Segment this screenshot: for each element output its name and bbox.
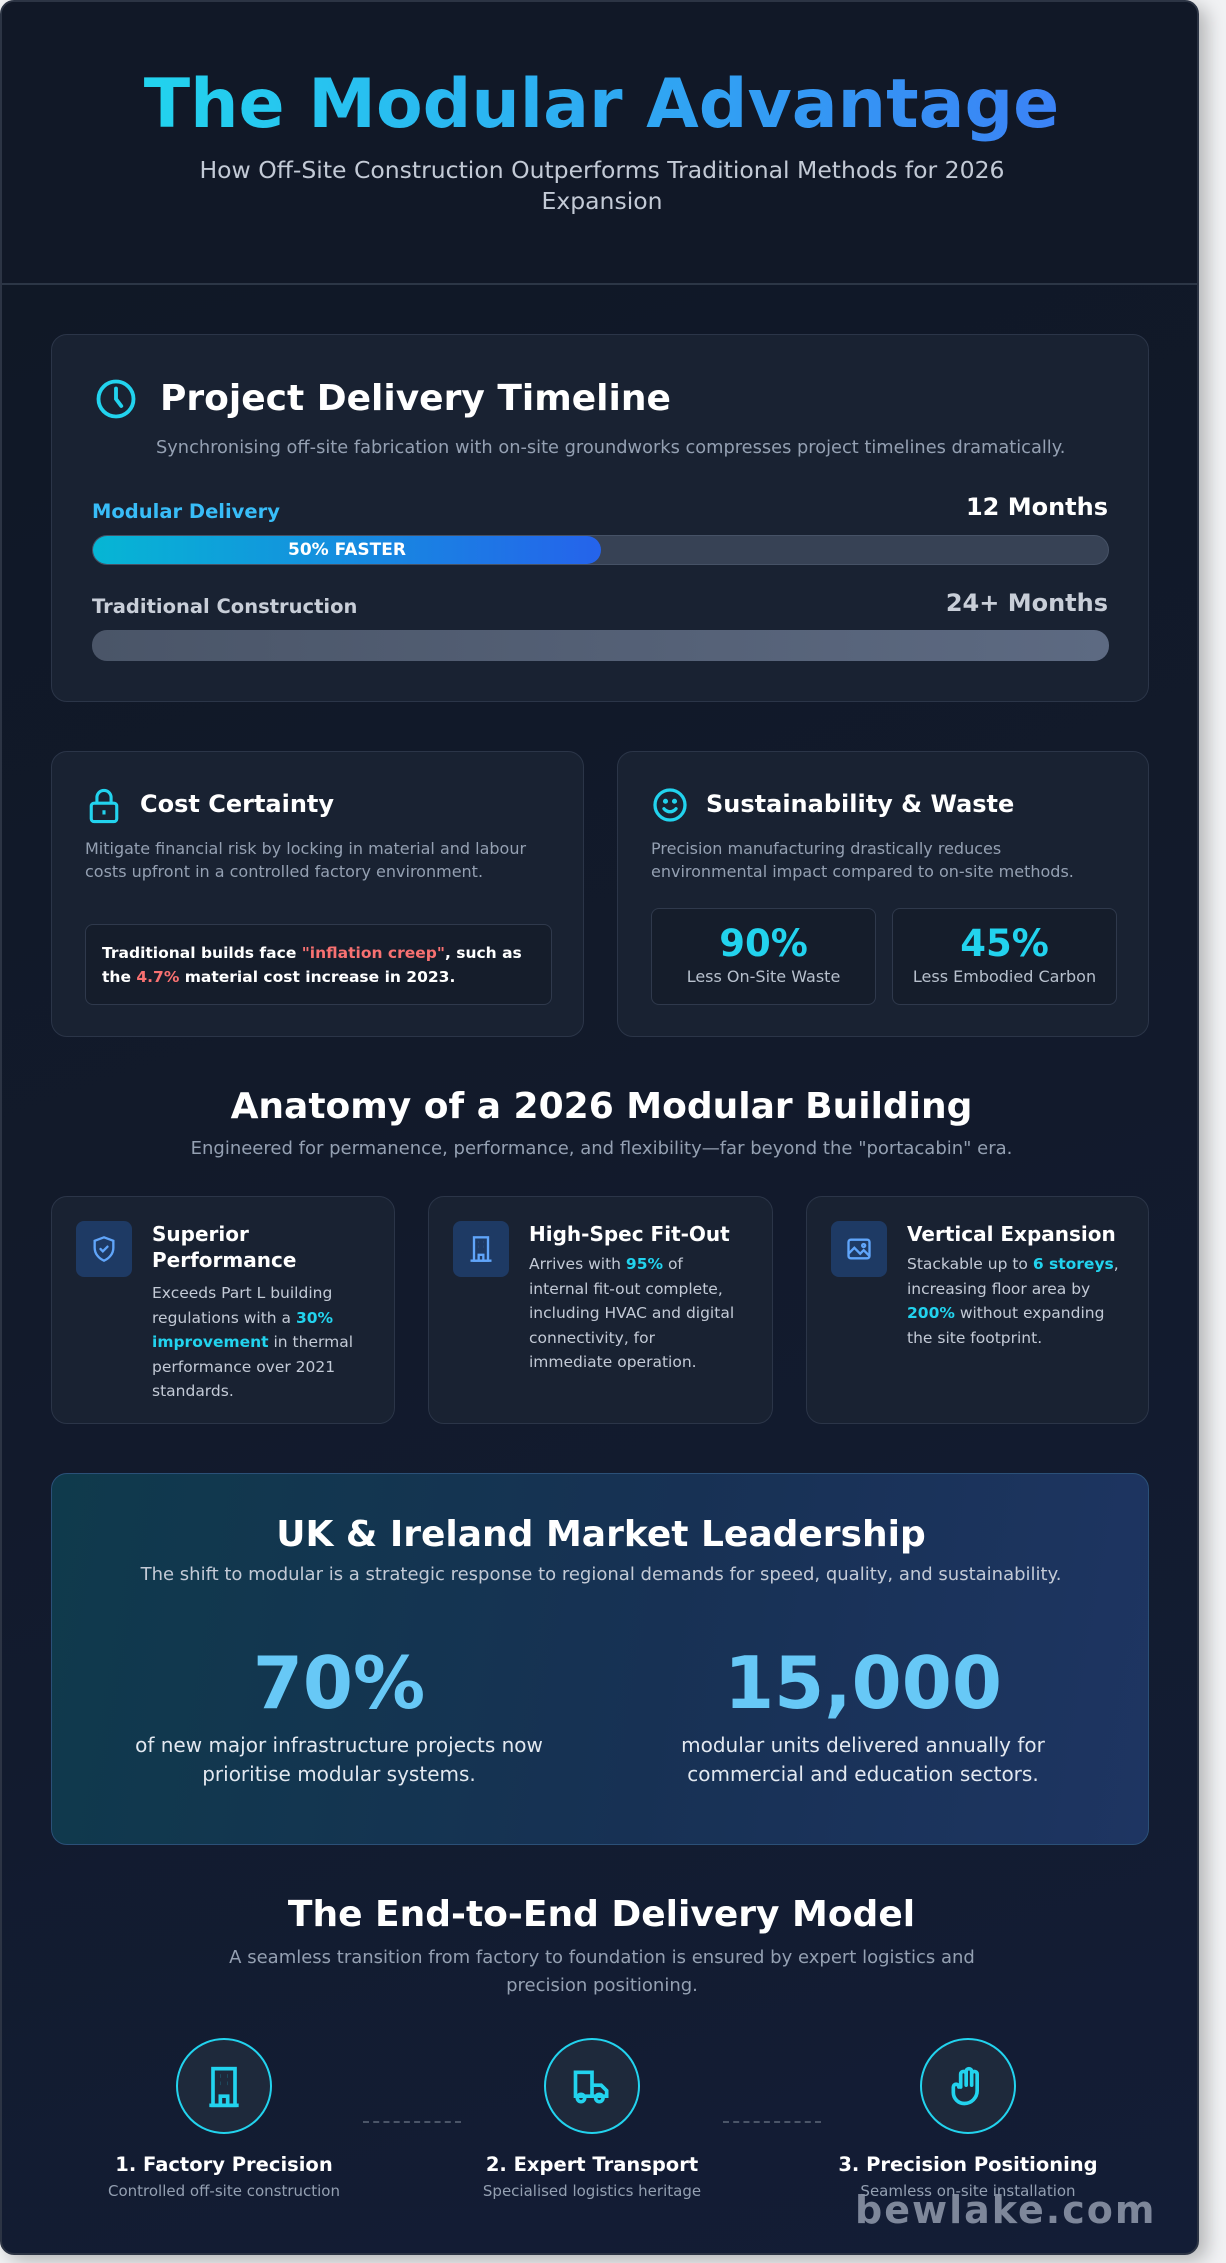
heading: Project Delivery Timeline: [160, 378, 671, 419]
stat: 70%: 70%: [253, 1641, 425, 1725]
description: Mitigate financial risk by locking in material and labour costs upfront in a controlled factory environment.: [85, 839, 526, 881]
panel: sustainability: [617, 751, 1149, 1037]
step 3: [838, 2038, 1098, 2200]
title: Superior: [152, 1222, 249, 1246]
panel: market leadership: [51, 1473, 1149, 1845]
arrow: connector 2: [723, 2121, 821, 2123]
step 2: Specialised logistics heritage: [483, 2182, 701, 2200]
step 1: [108, 2038, 340, 2200]
subheading: anatomy: Engineered for permanence, performance, and flexibility—far beyond the "portacabin" era.: [191, 1138, 1012, 1159]
heading: delivery model: The End-to-End Delivery Model: [288, 1894, 915, 1935]
step 2: [483, 2038, 701, 2200]
icon: image: [831, 1221, 887, 1277]
title: [152, 1222, 296, 1272]
stat: 70%: prioritise modular systems.: [202, 1762, 476, 1786]
stat: 90%: [651, 908, 876, 1005]
stat: 45%: 45%: [960, 922, 1049, 965]
watermark: bewlake.com: [855, 2188, 1156, 2232]
card: superior performance: [51, 1196, 395, 1424]
icon: smiley: [653, 788, 687, 822]
stat: 90%: Less On-Site Waste: [687, 967, 840, 986]
title: High-Spec Fit-Out: [529, 1222, 730, 1246]
description: Precision manufacturing drastically reduces environmental impact compared to on-site methods.: [651, 839, 1074, 881]
step 1: 1. Factory Precision: [115, 2153, 333, 2176]
panel: timeline: [51, 334, 1149, 702]
subheading: delivery model: A seamless transition from factory to foundation is ensured by expert logistics and precision positioning.: [229, 1947, 975, 1996]
title: Vertical Expansion: [907, 1222, 1116, 1246]
callout: [85, 924, 552, 1005]
icon: shield: [76, 1221, 132, 1277]
icon: lock: [90, 788, 118, 824]
stat: 70%: [135, 1641, 543, 1786]
body: Arrives with 95% of internal fit-out complete, including HVAC and digital connectivity, for immediate operation.: [529, 1255, 734, 1371]
label: modular: Modular Delivery: [92, 500, 280, 523]
icon: building: [453, 1221, 509, 1277]
value: 24 months: 24+ Months: [946, 589, 1108, 617]
bar: traditional: [92, 630, 1109, 661]
callout: Traditional builds face "inflation creep", such as the 4.7% material cost increase in 2023.: [102, 944, 522, 986]
step 2: 2. Expert Transport: [486, 2153, 698, 2176]
value: 12 months: 12 Months: [966, 493, 1108, 521]
stat: 15,000: commercial and education sectors.: [687, 1762, 1039, 1786]
stat: 15,000: [681, 1641, 1045, 1786]
icon: factory: [176, 2038, 272, 2134]
title: Performance: [152, 1248, 296, 1272]
stat: 45%: [892, 908, 1117, 1005]
label: traditional: Traditional Construction: [92, 595, 357, 618]
heading: UK & Ireland Market Leadership: [276, 1514, 926, 1555]
heading: Cost Certainty: [140, 790, 334, 818]
icon: truck: [544, 2038, 640, 2134]
heading: anatomy: Anatomy of a 2026 Modular Building: [231, 1086, 972, 1127]
stat: 15,000: modular units delivered annually for: [681, 1733, 1045, 1757]
stat: 45%: Less Embodied Carbon: [913, 967, 1096, 986]
description: Synchronising off-site fabrication with on-site groundworks compresses project timelines dramatically.: [156, 437, 1065, 458]
arrow: connector 1: [363, 2121, 461, 2123]
card: vertical expansion: [806, 1196, 1149, 1424]
title: The Modular Advantage: [144, 65, 1059, 144]
icon: hand: [920, 2038, 1016, 2134]
step 1: Controlled off-site construction: [108, 2182, 340, 2200]
icon: clock: [96, 380, 136, 418]
bar: modular: 50% FASTER: [288, 540, 406, 560]
stat: 15,000: 15,000: [724, 1641, 1002, 1725]
body: Exceeds Part L building regulations with a 30% improvement in thermal performance over 2021 standards.: [152, 1284, 353, 1400]
stat: 90%: 90%: [719, 922, 808, 965]
heading: Sustainability & Waste: [706, 790, 1014, 818]
stat: 70%: of new major infrastructure projects now: [135, 1733, 543, 1757]
bar: modular: [92, 535, 1109, 565]
card: high-spec fit-out: [428, 1196, 773, 1424]
step 3: 3. Precision Positioning: [838, 2153, 1098, 2176]
body: Stackable up to 6 storeys, increasing floor area by 200% without expanding the site footprint.: [907, 1255, 1119, 1346]
subheading: The shift to modular is a strategic response to regional demands for speed, quality, and sustainability.: [141, 1564, 1061, 1585]
step 3: Seamless on-site installation: [860, 2182, 1076, 2200]
header: [2, 2, 1201, 285]
subtitle: How Off-Site Construction Outperforms Traditional Methods for 2026 Expansion: [199, 156, 1004, 215]
panel: cost certainty: [51, 751, 584, 1037]
